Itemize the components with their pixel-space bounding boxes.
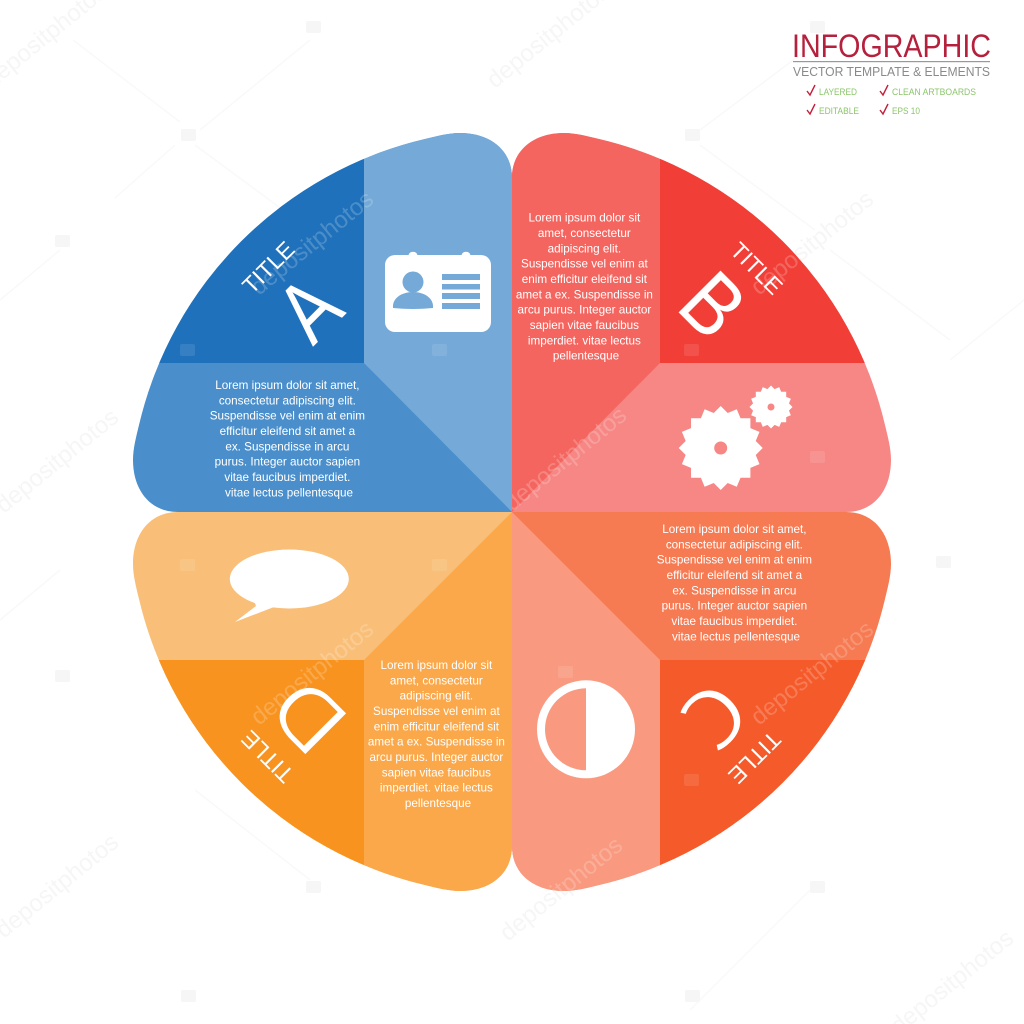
text block C: purus. Integer auctor sapien xyxy=(662,600,807,613)
text: depositphotos xyxy=(746,186,879,301)
text block A: Lorem ipsum dolor sit amet, xyxy=(215,379,359,392)
text: depositphotos xyxy=(746,616,879,731)
letter D: D xyxy=(251,659,366,774)
text block D: Lorem ipsum dolor sit xyxy=(381,659,493,672)
title: TITLE D: TITLE xyxy=(236,725,299,788)
text block B: amet a ex. Suspendisse in xyxy=(516,288,653,301)
text block C: vitae lectus pellentesque xyxy=(672,630,800,643)
text block C: efficitur eleifend sit amet a xyxy=(667,569,803,582)
icon: gears xyxy=(679,386,792,490)
text block A: efficitur eleifend sit amet a xyxy=(220,425,356,438)
text block D: enim efficitur eleifend sit xyxy=(374,720,500,733)
text block C: consectetur adipiscing elit. xyxy=(666,538,803,551)
panel: quadrant D (orange) xyxy=(133,512,512,891)
text block D: pellentesque xyxy=(405,797,471,810)
title: TITLE C: TITLE xyxy=(723,726,786,789)
text block B: Lorem ipsum dolor sit xyxy=(529,212,641,225)
subheading: VECTOR TEMPLATE & ELEMENTS xyxy=(793,64,990,79)
panel: quadrant A (blue) xyxy=(133,133,512,512)
text block B: sapien vitae faucibus xyxy=(530,319,639,332)
text block B: adipiscing elit. xyxy=(548,242,621,255)
panel: quadrant C (orange-red) xyxy=(512,512,891,891)
text block D: Suspendisse vel enim at xyxy=(373,705,500,718)
text block B: Suspendisse vel enim at xyxy=(521,258,648,271)
title: TITLE A: TITLE xyxy=(237,236,300,299)
text block D: amet, consectetur xyxy=(390,674,483,687)
header: infographic logo block xyxy=(792,28,991,116)
text block B: imperdiet. vitae lectus xyxy=(528,334,641,347)
icon: speech bubble xyxy=(230,550,349,622)
text block C: vitae faucibus imperdiet. xyxy=(671,615,797,628)
text block D: sapien vitae faucibus xyxy=(382,766,491,779)
text: depositphotos xyxy=(499,402,632,517)
text block C: Lorem ipsum dolor sit amet, xyxy=(662,523,806,536)
checklist: CLEAN ARTBOARDS xyxy=(892,87,976,97)
text block B: arcu purus. Integer auctor xyxy=(517,304,651,317)
text: depositphotos xyxy=(495,832,628,947)
letter A: A xyxy=(258,258,360,360)
text block D: arcu purus. Integer auctor xyxy=(369,751,503,764)
text block D: adipiscing elit. xyxy=(400,690,473,703)
checklist: EPS 10 xyxy=(892,106,920,116)
text block A: Suspendisse vel enim at enim xyxy=(210,410,365,423)
letter B: B xyxy=(661,254,764,357)
heading: INFOGRAPHIC: INFOGRAPHIC xyxy=(792,28,991,64)
text: depositphotos xyxy=(495,832,628,947)
text: depositphotos xyxy=(246,616,379,731)
text: depositphotos xyxy=(746,186,879,301)
text block A: vitae faucibus imperdiet. xyxy=(224,471,350,484)
checklist xyxy=(807,85,976,116)
text block A: purus. Integer auctor sapien xyxy=(215,456,360,469)
icon: id card xyxy=(385,252,491,332)
panel: quadrant B (red) xyxy=(512,133,891,512)
text block D: imperdiet. vitae lectus xyxy=(380,782,493,795)
text block A: consectetur adipiscing elit. xyxy=(219,394,356,407)
icon: half circle xyxy=(537,680,635,778)
text block A: ex. Suspendisse in arcu xyxy=(225,440,349,453)
text block B: amet, consectetur xyxy=(538,227,631,240)
title: TITLE B: TITLE xyxy=(725,237,788,300)
checklist: LAYERED xyxy=(819,87,857,97)
letter C: C xyxy=(654,662,768,777)
text block B: enim efficitur eleifend sit xyxy=(522,273,648,286)
text block D: amet a ex. Suspendisse in xyxy=(368,736,505,749)
text block A: vitae lectus pellentesque xyxy=(225,486,353,499)
text: depositphotos xyxy=(746,616,879,731)
text: depositphotos xyxy=(246,186,379,301)
text block C: ex. Suspendisse in arcu xyxy=(672,584,796,597)
text block B: pellentesque xyxy=(553,350,619,363)
checklist: EDITABLE xyxy=(819,106,859,116)
text block C: Suspendisse vel enim at enim xyxy=(657,554,812,567)
